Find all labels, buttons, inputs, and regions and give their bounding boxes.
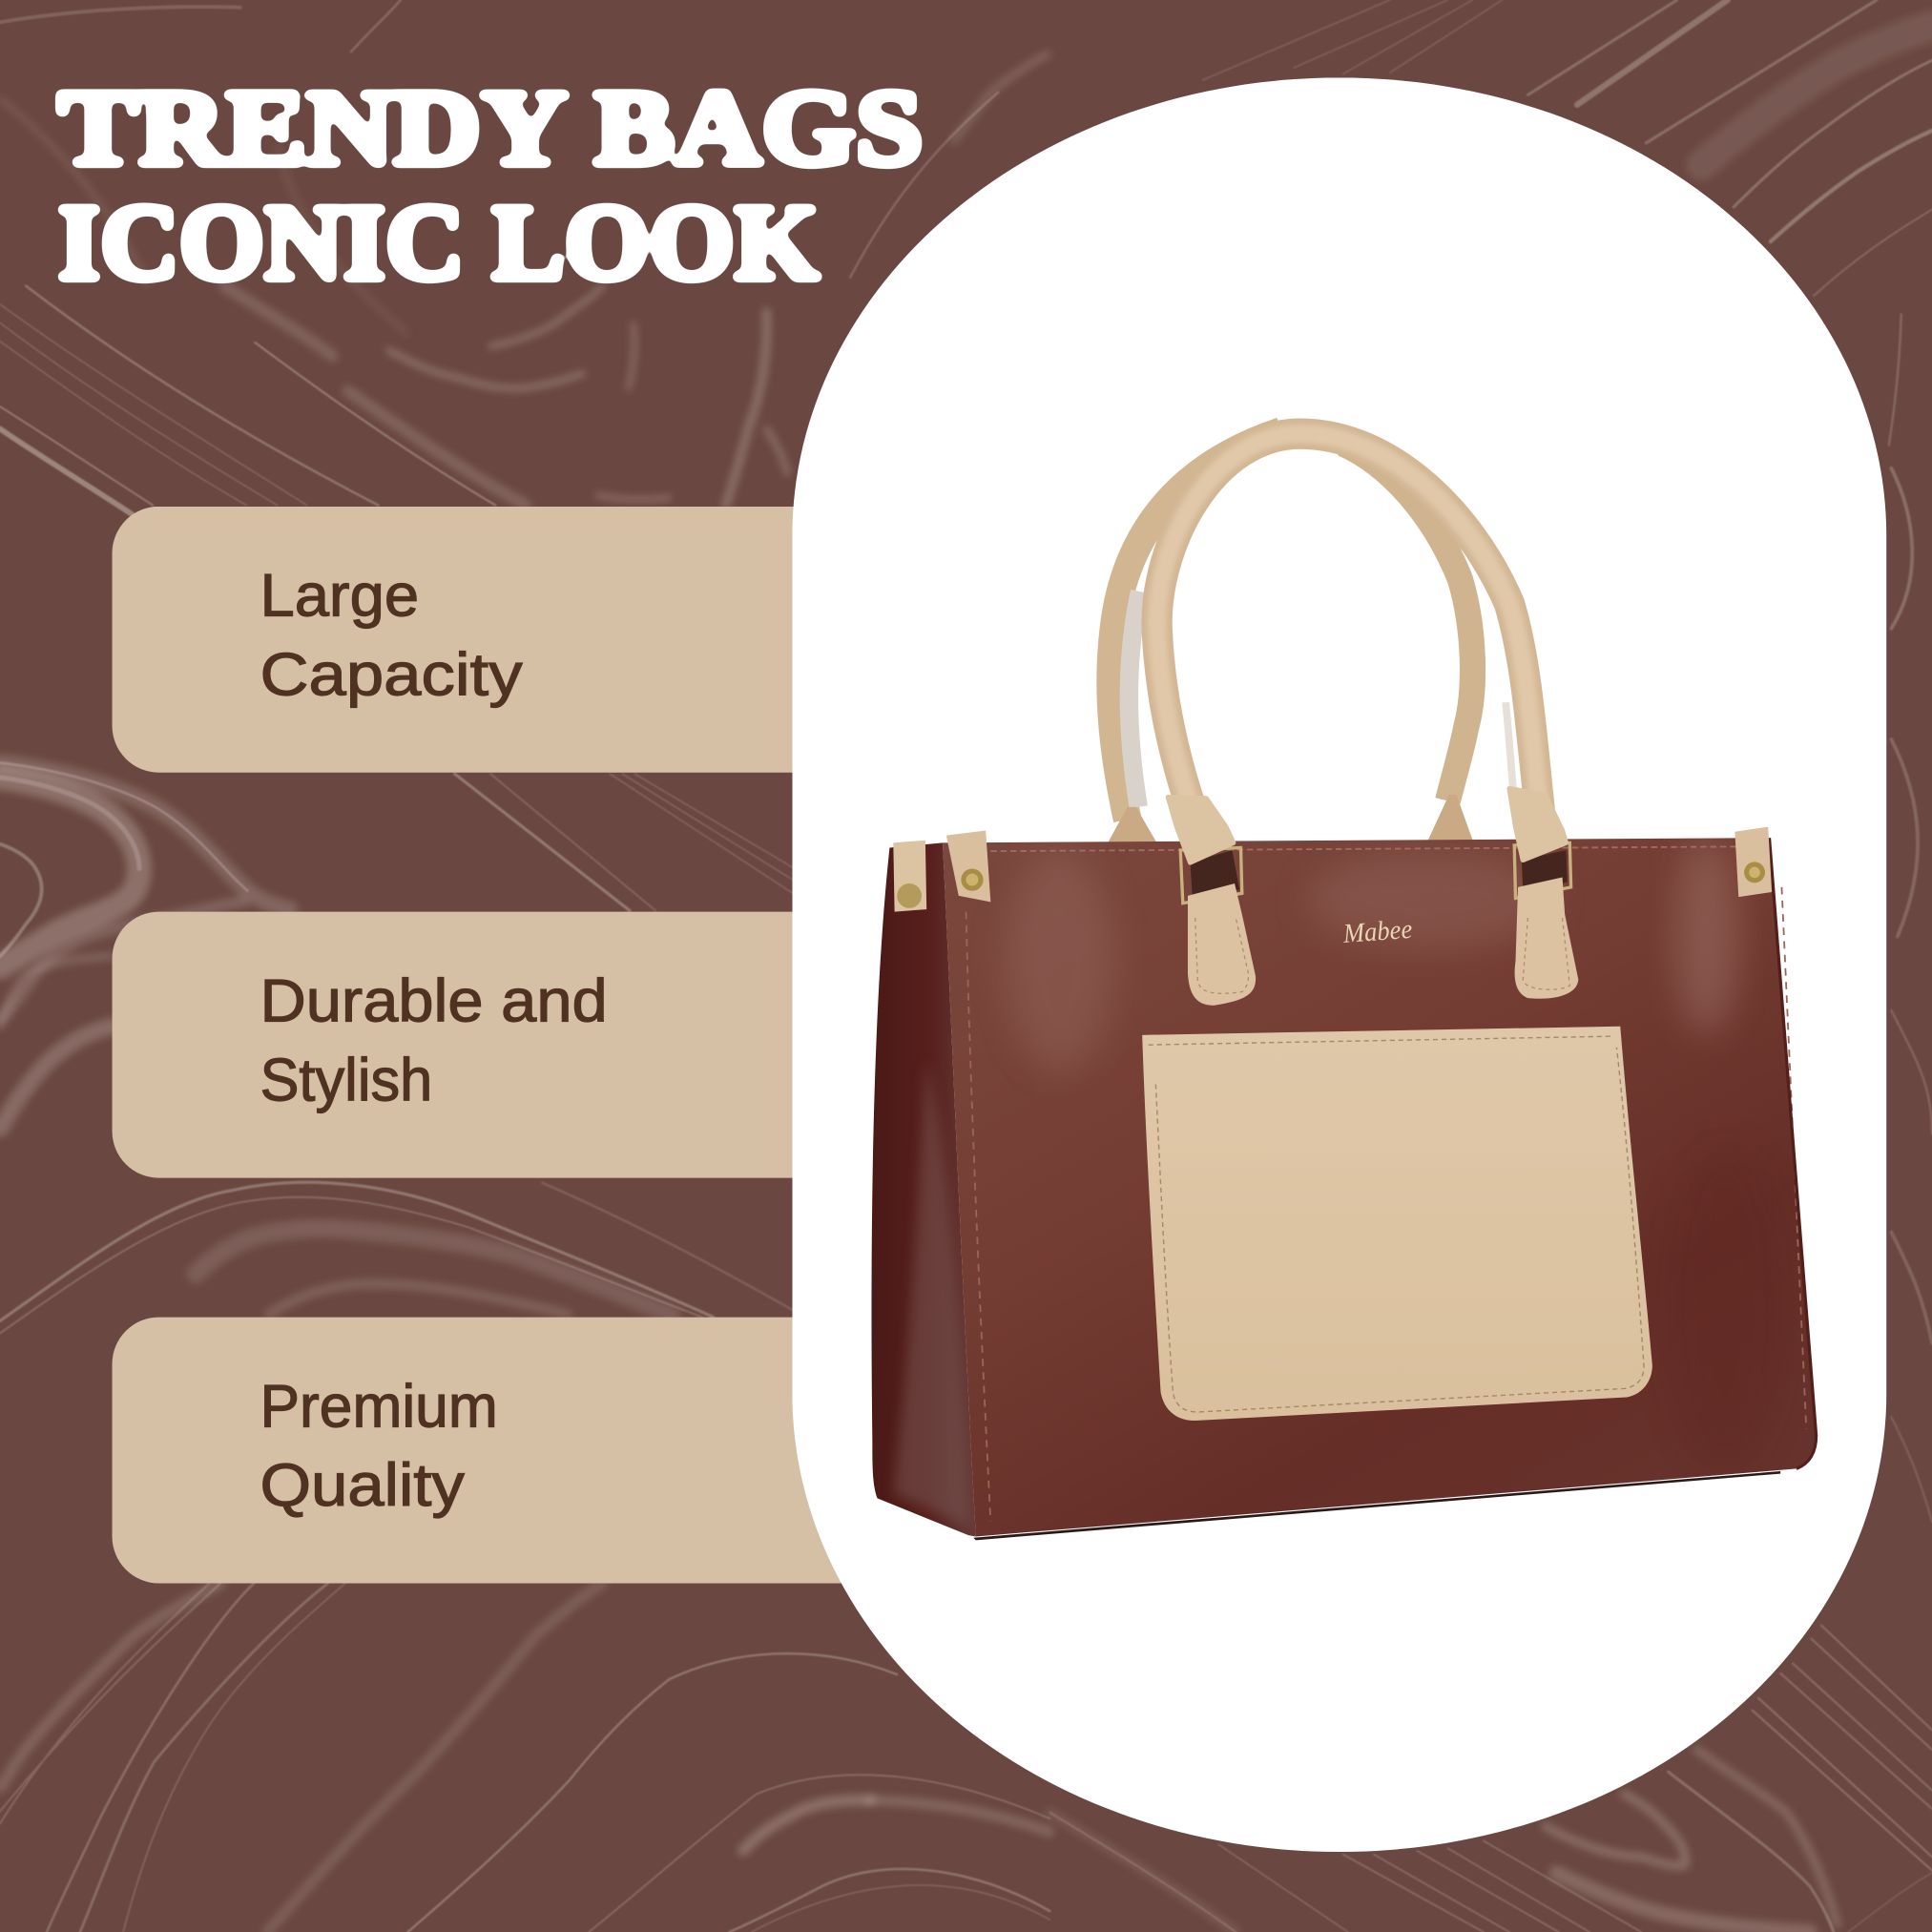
front handle — [1157, 434, 1543, 842]
card text: large capacity: Large — [260, 563, 419, 630]
card text: large capacity: Capacity — [260, 641, 523, 708]
card text: premium quality: Premium — [260, 1374, 498, 1441]
product photo: handbag — [872, 431, 1817, 1540]
strap tabs with rivets — [893, 827, 1772, 912]
handle rings and lower tabs — [1168, 789, 1578, 1006]
card: durable and stylish — [113, 912, 999, 1178]
bag logo: Mabee — [1341, 915, 1413, 949]
card text: durable and stylish: Stylish — [260, 1047, 432, 1113]
card text: premium quality: Quality — [260, 1452, 465, 1519]
title — [58, 68, 923, 302]
card: large capacity — [113, 507, 999, 773]
title: TRENDY BAGS — [58, 68, 923, 188]
card text: durable and stylish: Durable and — [260, 968, 608, 1035]
back handle — [1107, 431, 1513, 845]
white rounded pill panel — [792, 77, 1886, 1852]
side panel — [872, 842, 976, 1536]
front pocket — [1142, 1027, 1652, 1421]
front panel — [943, 838, 1817, 1536]
bag bottom shadow — [973, 1471, 1780, 1540]
card: premium quality — [113, 1318, 999, 1584]
title: ICONIC LOOK — [58, 182, 820, 302]
